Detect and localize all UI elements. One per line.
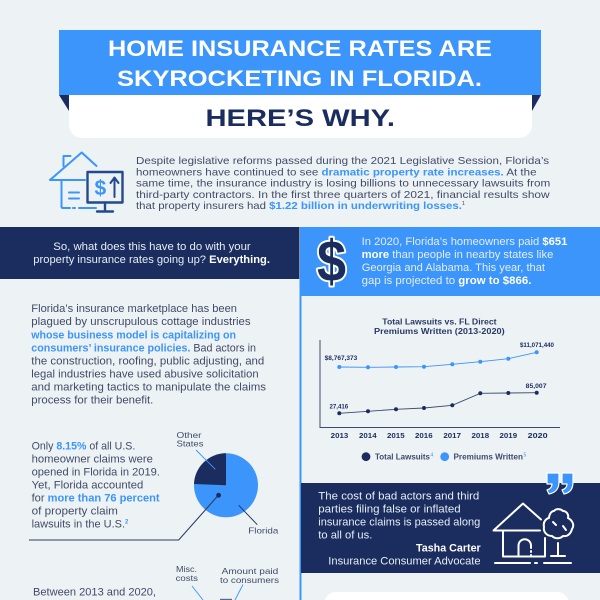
- panel: quote: parties filing false or inflated: [318, 503, 461, 515]
- series: total lawsuits: 27,416: [330, 405, 349, 411]
- donut chart labels: Amount paid: [222, 567, 279, 576]
- text: insurance marketplace: whose business model is capitalizing on: [30, 329, 236, 341]
- donut chart labels: Misc.: [176, 565, 197, 574]
- text: between 2013 and 2020: Between 2013 and 2020,: [33, 586, 156, 598]
- pie chart: Florida lawsuit share: States: [176, 440, 204, 449]
- x axis years: 2016: [415, 431, 433, 440]
- panel: quote: Insurance Consumer Advocate: [328, 555, 481, 567]
- intro text: third-party contractors. In the first three quarters of 2021, financial results show: [136, 190, 550, 201]
- intro text: that property insurers had $1.22 billion in underwriting losses.: [136, 201, 441, 212]
- panel: premium gap: [300, 227, 600, 296]
- text: claims share: Only 8.15% of all U.S.: [32, 440, 135, 452]
- intro text: Despite legislative reforms passed during the 2021 Legislative Session, Florida’s: [136, 156, 549, 167]
- panel: premium gap: more than people in nearby states like: [362, 249, 553, 261]
- intro text: 1: [462, 201, 465, 207]
- title banner: [59, 30, 541, 138]
- pie chart: Florida lawsuit share: [29, 431, 279, 540]
- icon: house and tree: [494, 504, 573, 563]
- legend: Premiums Written: [454, 452, 523, 462]
- text: insurance marketplace: [30, 303, 266, 406]
- donut chart labels: [176, 565, 279, 600]
- x axis years: 2017: [443, 431, 461, 440]
- chart title: [374, 316, 505, 336]
- text: claims share: lawsuits in the U.S.: [32, 518, 127, 530]
- icon: house with monitor and rising dollar: [50, 152, 122, 212]
- icon: quotation marks: [547, 473, 573, 494]
- text: insurance marketplace: process for their benefit.: [31, 394, 153, 406]
- donut chart labels: costs: [176, 574, 198, 583]
- text: claims share: opened in Florida in 2019.: [32, 466, 160, 478]
- pie chart: Florida lawsuit share: Florida: [248, 526, 279, 535]
- text: claims share: of property claim: [32, 505, 118, 517]
- text: insurance marketplace: legal industries have used abusive solicitation: [31, 368, 259, 380]
- legend: 4: [430, 452, 434, 458]
- legend: [362, 452, 526, 462]
- icon: house with monitor and rising dollar: $: [94, 177, 106, 200]
- series: premiums written: $8,767,373: [325, 356, 358, 362]
- column divider: [300, 279, 302, 600]
- text: insurance marketplace: and marketing tactics to manipulate the claims: [31, 381, 266, 393]
- panel: quote: to all of us.: [318, 529, 372, 541]
- text: claims share: 2: [125, 519, 129, 525]
- panel: question banner: So, what does this have to do with your: [53, 241, 251, 253]
- x axis years: 2019: [500, 431, 517, 440]
- text: claims share: for more than 76 percent: [32, 492, 160, 504]
- x axis years: 2015: [387, 431, 405, 440]
- title banner: SKYROCKETING IN FLORIDA.: [117, 66, 482, 91]
- line chart: lawsuits vs premiums: [320, 316, 560, 462]
- chart title: Total Lawsuits vs. FL Direct: [382, 316, 497, 326]
- legend: Total Lawsuits: [375, 452, 431, 462]
- title banner: HERE’S WHY.: [206, 105, 395, 132]
- panel: premium gap: gap is projected to grow to $866.: [362, 275, 531, 287]
- panel: premium gap: Georgia and Alabama. This year, that: [362, 262, 546, 274]
- text: claims share: [32, 440, 160, 530]
- panel: question banner: property insurance rates going up? Everything.: [33, 254, 270, 266]
- x axis years: 2018: [472, 431, 489, 440]
- series: total lawsuits: [330, 384, 547, 415]
- panel: question banner: [0, 227, 300, 279]
- panel: quote: insurance claims is passed along: [318, 516, 480, 528]
- text: insurance marketplace: consumers’ insurance policies. Bad actors in: [31, 342, 256, 354]
- title banner: HOME INSURANCE RATES ARE: [108, 36, 492, 61]
- panel: quote: The cost of bad actors and third: [318, 490, 479, 502]
- series: premiums written: [325, 343, 555, 369]
- intro text: homeowners have continued to see dramatic property rate increases. At the: [136, 167, 537, 178]
- text: claims share: homeowner claims were: [32, 453, 153, 465]
- chart title: Premiums Written (2013-2020): [374, 326, 505, 336]
- panel: quote: Tasha Carter: [416, 542, 481, 554]
- x axis years: 2013: [331, 431, 348, 440]
- card: next section top: [324, 592, 569, 600]
- series: total lawsuits: 85,007: [526, 384, 547, 390]
- text: insurance marketplace: the construction, roofing, public adjusting, and: [31, 355, 264, 367]
- intro text: [136, 156, 550, 212]
- text: insurance marketplace: plagued by unscrupulous cottage industries: [31, 316, 251, 328]
- intro text: same time, the insurance industry is losing billions to unnecessary lawsuits from: [136, 179, 550, 190]
- panel: premium gap: In 2020, Florida’s homeowners paid $651: [362, 236, 567, 248]
- text: insurance marketplace: Florida’s insurance marketplace has been: [31, 303, 237, 315]
- icon: dollar sign: $: [317, 229, 346, 294]
- x axis years: 2020: [528, 431, 548, 440]
- pie chart: Florida lawsuit share: Other: [176, 431, 202, 440]
- x axis years: 2014: [359, 431, 377, 440]
- donut chart labels: to consumers: [220, 576, 279, 585]
- panel: quote: [301, 473, 600, 573]
- x axis years: [331, 431, 548, 440]
- text: claims share: Yet, Florida accounted: [32, 479, 143, 491]
- legend: 5: [524, 452, 526, 458]
- series: premiums written: $11,071,440: [520, 343, 555, 349]
